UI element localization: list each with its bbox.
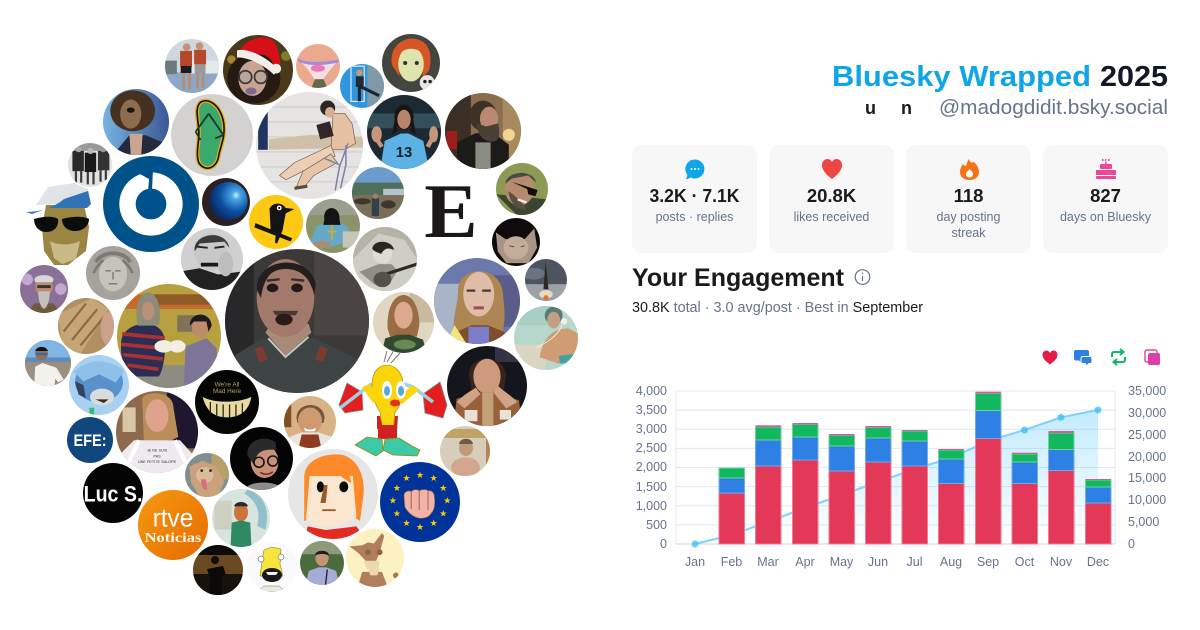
- avatar: man with long hair in green shirt: [373, 292, 434, 353]
- avatar: anime girl red hair: [382, 34, 440, 92]
- user name glyphs and handle: u: [865, 98, 876, 118]
- panel: days on Bluesky: days on Bluesky: [1060, 210, 1152, 224]
- stacked bars: replies: [719, 410, 1111, 503]
- avatar: man on blue lift: [340, 64, 384, 108]
- avatar: EU fist: ★: [389, 496, 397, 506]
- avatar: Cheshire cat grin: We're All: [215, 382, 239, 389]
- left axis labels: 2,000: [636, 460, 667, 474]
- month labels: Jul: [907, 555, 922, 569]
- stacked bars: reposts: [719, 394, 1111, 487]
- avatar: green flip flop: [171, 94, 253, 176]
- avatar: blue sphere: [202, 178, 250, 226]
- month labels: Jan: [685, 555, 705, 569]
- panel: posts and replies: 3.2K · 7.1K: [650, 185, 740, 206]
- engagement summary: 30.8K total · 3.0 avg/post · Best in September: [632, 300, 923, 316]
- avatar: EU fist: [380, 462, 460, 542]
- right axis labels: 15,000: [1128, 471, 1166, 485]
- avatar: EU fist: ★: [393, 483, 401, 493]
- cumulative area and line: [692, 406, 1102, 548]
- month labels: Sep: [977, 555, 999, 569]
- avatar: Cheshire cat grin: [195, 370, 259, 434]
- avatar: rtve Noticias logo: rtve: [153, 504, 193, 532]
- right axis labels: 25,000: [1128, 428, 1166, 442]
- right axis labels: 10,000: [1128, 493, 1166, 507]
- avatar: smiling older man: [284, 396, 336, 448]
- avatar: orange-hair drawn character: [288, 449, 378, 539]
- month labels: Dec: [1087, 555, 1109, 569]
- month labels: Oct: [1015, 555, 1035, 569]
- avatar: Archer cartoon scene: [117, 284, 221, 388]
- right axis labels: 35,000: [1128, 384, 1166, 398]
- icon: reposts: [1112, 349, 1125, 365]
- avatar cloud: [20, 34, 578, 595]
- avatar: person in white t-shirt: [116, 391, 198, 473]
- avatar: EU fist: ★: [416, 522, 424, 532]
- avatar: Luc S. logo: [83, 463, 143, 523]
- icon: chat bubble: [685, 159, 704, 179]
- chart: monthly engagement: [636, 384, 1166, 569]
- icon: flame: [960, 159, 979, 180]
- avatar: woman with santa hat: [223, 35, 293, 105]
- avatar: dog face on person: [103, 89, 169, 155]
- avatar: woman with blond hair and blue background: [434, 258, 520, 344]
- right axis labels: 30,000: [1128, 406, 1166, 420]
- stacked bars: quotes: [756, 392, 1111, 480]
- avatar: blue circle logo: [103, 156, 199, 252]
- avatar: yellow crow logo: [249, 195, 303, 249]
- icon: heart: [822, 159, 842, 179]
- avatar: man with sunglasses in greenery: [496, 163, 548, 215]
- panel: likes received: 20.8K: [807, 185, 857, 206]
- panel: day posting streak: 118: [954, 185, 983, 206]
- panel: days on Bluesky: [1043, 145, 1168, 253]
- avatar: EU fist: ★: [402, 518, 410, 528]
- title: 2025: [1100, 61, 1168, 93]
- avatar: EFE logo: EFE:: [73, 431, 107, 450]
- avatar: Cheshire cat grin: Mad Here: [213, 388, 241, 395]
- avatar: person in white t-shirt: PAS: [153, 454, 161, 458]
- panel: day posting streak: streak: [951, 226, 986, 240]
- month labels: Aug: [940, 555, 962, 569]
- avatar: rtve Noticias logo: [138, 490, 208, 560]
- avatar: black and white group walking: [68, 143, 112, 187]
- avatar: EU fist: ★: [402, 473, 410, 483]
- avatar: EFE logo: [67, 417, 113, 463]
- avatar: Darth Vader in blue t-shirt: [306, 199, 360, 253]
- panel: days on Bluesky: 827: [1090, 185, 1121, 206]
- header: [832, 61, 1168, 119]
- avatar: person in white t-shirt: JE NE SUIS: [147, 449, 168, 453]
- panel: likes received: likes received: [794, 210, 869, 224]
- avatar: footballer number 13: 13: [396, 145, 412, 161]
- avatar: EU fist: ★: [416, 470, 424, 480]
- month labels: May: [830, 555, 854, 569]
- avatar: woman with guitar: [353, 227, 417, 291]
- panel: day posting streak: day posting: [937, 210, 1001, 224]
- left axis labels: 2,500: [636, 441, 667, 455]
- left axis labels: [636, 384, 667, 551]
- right axis labels: 20,000: [1128, 450, 1166, 464]
- avatar: EU fist: ★: [439, 508, 447, 518]
- avatar: yellow cartoon head: [258, 546, 284, 592]
- icon: info: [855, 270, 870, 284]
- avatar: Groucho: [181, 228, 243, 290]
- month labels: Feb: [721, 555, 742, 569]
- panel: posts and replies: posts · replies: [656, 210, 733, 224]
- avatar: rtve Noticias logo: Noticias: [145, 531, 202, 546]
- avatar: cat: [492, 218, 540, 266]
- avatar: comic character in green: [212, 489, 270, 547]
- month labels: [685, 555, 1109, 569]
- month labels: Jun: [868, 555, 888, 569]
- avatar: Tweety lifting weights: [339, 350, 447, 456]
- icon: quotes: [1145, 350, 1160, 365]
- avatar: underwear close-up: [296, 44, 340, 88]
- avatar: rocket launch: [525, 259, 567, 301]
- icon: cake: [1096, 159, 1116, 179]
- right axis labels: [1128, 384, 1166, 551]
- left axis labels: 4,000: [636, 384, 667, 398]
- user name glyphs and handle: @madogdidit.bsky.social: [939, 97, 1168, 119]
- avatar: bearded man purple background: [20, 265, 68, 313]
- avatar: Alsace drawing: [440, 426, 490, 476]
- left axis labels: 500: [646, 518, 667, 532]
- avatar: blue wolf: [69, 355, 129, 415]
- left axis labels: 1,500: [636, 480, 667, 494]
- avatar: phone man shirtless: [514, 306, 578, 370]
- avatar: E logo: E: [424, 168, 478, 254]
- month labels: Mar: [757, 555, 779, 569]
- icon: likes: [1042, 350, 1058, 364]
- panel: posts and replies: [632, 145, 757, 253]
- avatar: EU fist: ★: [393, 508, 401, 518]
- avatar: Eevee on cream: [346, 529, 404, 587]
- chart legend icons: [1042, 349, 1160, 366]
- panel: day posting streak: [906, 145, 1031, 253]
- right axis labels: 5,000: [1128, 515, 1159, 529]
- avatar: EU fist: ★: [443, 496, 451, 506]
- avatar: footballer number 13: [367, 95, 441, 169]
- left axis labels: 3,500: [636, 403, 667, 417]
- avatar: man pulling smile: [447, 346, 527, 426]
- left axis labels: 1,000: [636, 499, 667, 513]
- avatar: EU fist: ★: [430, 473, 438, 483]
- right axis labels: 0: [1128, 537, 1135, 551]
- avatar: person in white t-shirt: UNE PETITE SALOPE: [138, 460, 177, 464]
- avatar: cartoon rat: [185, 453, 229, 497]
- title: Bluesky Wrapped: [832, 61, 1091, 93]
- panel: likes received: [769, 145, 894, 253]
- user name glyphs and handle: n: [901, 98, 912, 118]
- avatar: statue with cap and sunglasses: [26, 183, 91, 265]
- avatar: man with glasses on black: [230, 427, 293, 490]
- left axis labels: 0: [660, 537, 667, 551]
- avatar: sketch of man reading in chair: [256, 92, 363, 199]
- avatar: EU fist: ★: [439, 483, 447, 493]
- avatar: silhouette in dark hall: [193, 545, 243, 595]
- avatar: medusa relief: [86, 246, 140, 300]
- left axis labels: 3,000: [636, 422, 667, 436]
- avatar: beach cliffs: [352, 167, 404, 219]
- avatar: man with sunglasses at the beach: [25, 340, 71, 386]
- grid lines: [676, 391, 1115, 544]
- icon: replies: [1074, 350, 1092, 366]
- avatar: two men in red shirts: [165, 39, 219, 93]
- heading: Your Engagement: Your Engagement: [632, 264, 845, 292]
- avatar: blonde hair: [58, 298, 114, 354]
- avatar: bearded man in profile: [445, 93, 521, 169]
- avatar: EU fist: ★: [430, 518, 438, 528]
- avatar: large portrait of general: [225, 249, 369, 393]
- month labels: Nov: [1050, 555, 1073, 569]
- stacked bars: likes: [719, 438, 1111, 544]
- month labels: Apr: [795, 555, 815, 569]
- avatar: man with glasses and bag strap: [300, 541, 344, 585]
